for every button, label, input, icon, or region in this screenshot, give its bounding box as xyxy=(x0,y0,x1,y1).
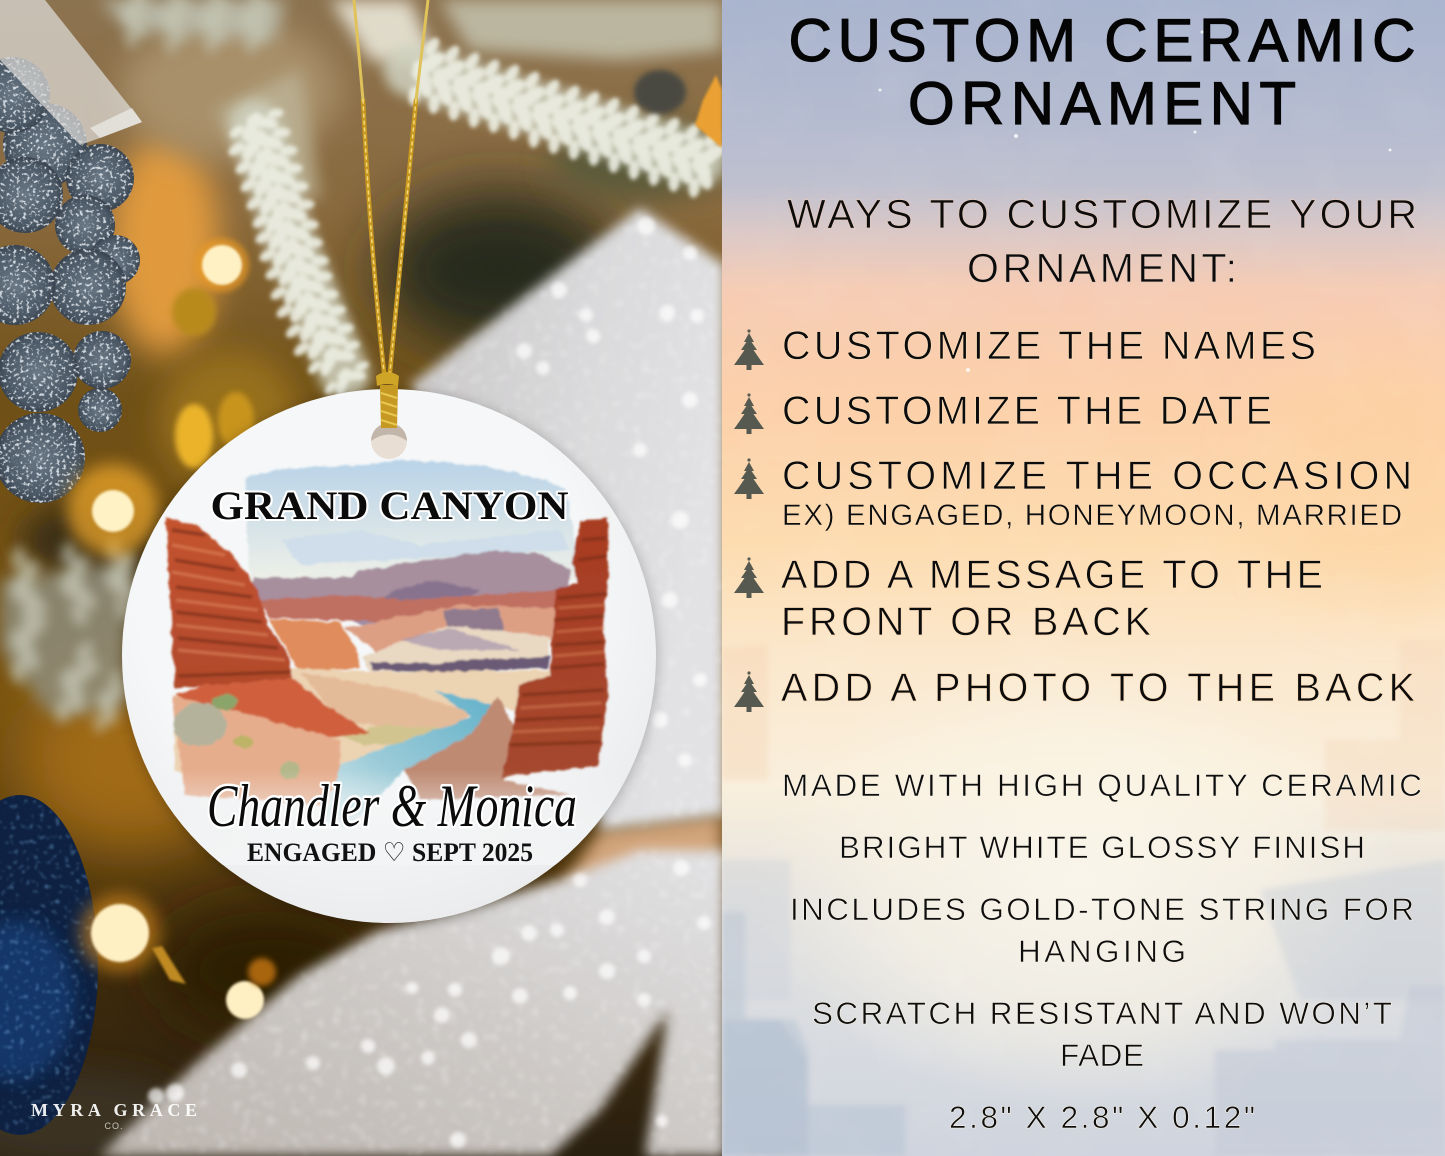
bokeh lights xyxy=(67,70,722,1019)
icon: tree xyxy=(734,458,764,499)
snow specks xyxy=(878,30,1392,372)
item: occasion: CUSTOMIZE THE OCCASION xyxy=(782,454,1412,498)
icon: tree xyxy=(734,557,764,598)
heading: ORNAMENT xyxy=(908,70,1296,137)
icon: tree xyxy=(734,671,764,712)
left cliff xyxy=(166,517,292,688)
heading: CUSTOM CERAMIC xyxy=(788,7,1416,74)
glitter gift ribbon xyxy=(96,201,722,1156)
clouds xyxy=(280,530,570,565)
river xyxy=(325,690,498,830)
product details: BRIGHT WHITE GLOSSY FINISH xyxy=(839,829,1365,865)
item: names: CUSTOMIZE THE NAMES xyxy=(782,324,1316,368)
sand valley xyxy=(175,668,550,795)
item: occasion xyxy=(734,454,1412,532)
plateau xyxy=(361,626,550,672)
foreground xyxy=(172,696,340,805)
mesa top purple xyxy=(254,551,571,605)
sky wash xyxy=(245,460,580,585)
brand logo xyxy=(31,1104,196,1129)
brand logo: CO. xyxy=(104,1121,124,1131)
organza ribbon xyxy=(0,0,142,145)
faint city skyline xyxy=(722,640,1445,1156)
frosted pine branches xyxy=(0,0,734,739)
canyon illustration xyxy=(160,460,620,865)
panel: product photo background xyxy=(0,0,734,1156)
rock strata xyxy=(172,530,606,745)
red slope xyxy=(175,678,370,742)
ornament hole xyxy=(371,423,407,459)
product details: HANGING xyxy=(1018,933,1186,969)
subheading xyxy=(787,191,1417,291)
list: customization options xyxy=(734,324,1415,712)
blue glitter baubles xyxy=(0,50,145,1140)
right slope xyxy=(405,696,570,800)
product details: FADE xyxy=(1060,1037,1144,1073)
icon: tree xyxy=(734,393,764,434)
brand logo: MYRA GRACE xyxy=(31,1100,197,1120)
red strata xyxy=(258,590,566,622)
painting fade xyxy=(160,770,620,865)
item: photo: ADD A PHOTO TO THE BACK xyxy=(781,666,1415,710)
item: occasion: EX) ENGAGED, HONEYMOON, MARRIED xyxy=(782,499,1402,532)
product details: SCRATCH RESISTANT AND WON’T xyxy=(812,995,1392,1031)
product details: 2.8" X 2.8" X 0.12" xyxy=(949,1099,1255,1135)
subheading: ORNAMENT: xyxy=(967,245,1237,291)
orange wall xyxy=(268,619,360,672)
item: date: CUSTOMIZE THE DATE xyxy=(782,389,1272,433)
ornament names: Chandler & Monica xyxy=(207,773,577,839)
item: message: FRONT OR BACK xyxy=(781,600,1151,644)
product details xyxy=(782,767,1422,1135)
ceramic ornament disc xyxy=(121,372,657,926)
right spire xyxy=(502,519,608,777)
item: message xyxy=(734,553,1323,644)
heading xyxy=(788,7,1416,137)
gold knot xyxy=(376,372,399,428)
ornament title: GRAND CANYON xyxy=(210,483,569,528)
item: message: ADD A MESSAGE TO THE xyxy=(781,553,1323,597)
gold hanging string xyxy=(354,0,428,372)
glints xyxy=(148,217,711,1148)
product details: MADE WITH HIGH QUALITY CERAMIC xyxy=(782,767,1422,803)
subheading: WAYS TO CUSTOMIZE YOUR xyxy=(787,191,1417,237)
icon: tree xyxy=(734,329,764,370)
panel: watercolor info background xyxy=(722,0,1445,1156)
ornament date line: ENGAGED ♡ SEPT 2025 xyxy=(247,838,533,867)
product details: INCLUDES GOLD-TONE STRING FOR xyxy=(790,891,1414,927)
